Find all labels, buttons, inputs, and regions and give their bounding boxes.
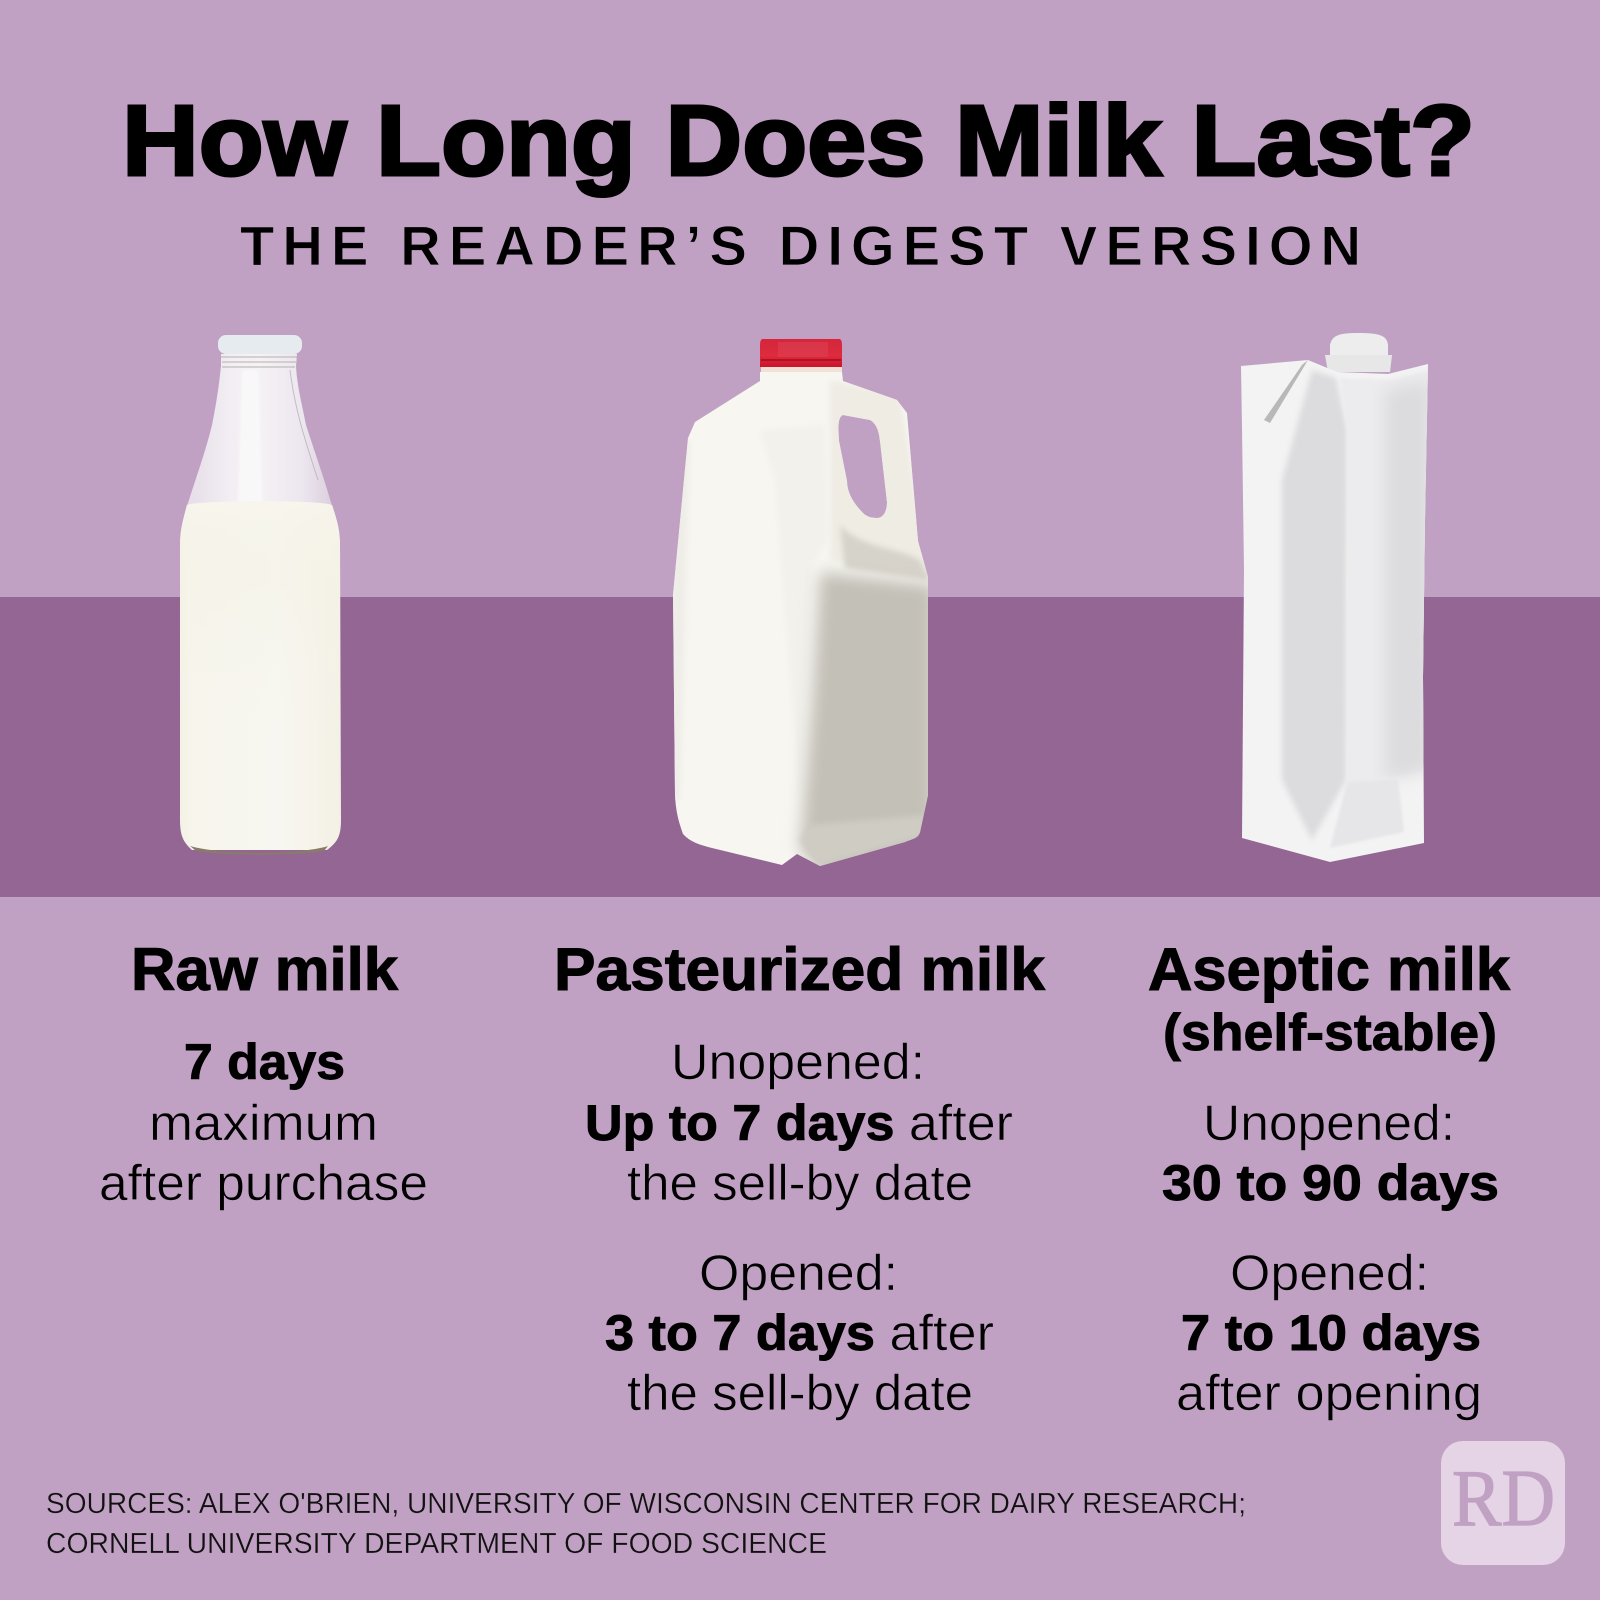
unopened: aseptic: 30 to 90 days [1162,1155,1499,1211]
heading: raw milk: Raw milk [131,936,399,1003]
column: pasteurized milk [554,936,1046,1421]
illustration: glass milk bottle [176,335,346,855]
opened: pasteurized [605,1245,994,1421]
sources [46,1488,1246,1560]
title: How Long Does Milk Last? [122,85,1475,197]
heading: aseptic milk [1148,936,1511,1062]
shelf life: raw milk: maximum [149,1095,378,1151]
shelf life: raw milk: after purchase [99,1155,428,1211]
unopened: aseptic: Unopened: [1203,1095,1455,1151]
illustration: plastic milk jug [673,339,928,866]
shelf life: raw milk: 7 days [184,1034,345,1090]
column: aseptic milk [1148,936,1511,1421]
logo: RD badge [1441,1441,1565,1565]
heading: aseptic milk: Aseptic milk [1148,936,1511,1003]
opened: aseptic [1176,1245,1482,1421]
unopened: pasteurized: Unopened: [671,1034,925,1090]
heading: aseptic milk: (shelf-stable) [1163,1004,1497,1062]
heading: pasteurized milk: Pasteurized milk [554,936,1046,1003]
subtitle: THE READER’S DIGEST VERSION [240,214,1361,277]
sources: CORNELL UNIVERSITY DEPARTMENT OF FOOD SCIENCE [46,1528,827,1560]
opened: aseptic: Opened: [1230,1245,1429,1301]
unopened: pasteurized: Up to 7 days after [585,1095,1013,1151]
unopened: pasteurized [585,1034,1013,1211]
opened: aseptic: 7 to 10 days [1181,1305,1481,1361]
opened: pasteurized: the sell-by date [627,1365,973,1421]
column: raw milk [99,936,428,1211]
dark shelf band [0,597,1600,897]
shelf life: raw milk [99,1034,428,1211]
unopened: aseptic [1162,1095,1499,1211]
opened: pasteurized: Opened: [699,1245,898,1301]
opened: aseptic: after opening [1176,1365,1482,1421]
opened: pasteurized: 3 to 7 days after [605,1305,994,1361]
logo: RD badge: RD [1452,1455,1555,1543]
unopened: pasteurized: the sell-by date [627,1155,973,1211]
illustration: aseptic carton [1235,333,1435,870]
sources: SOURCES: ALEX O'BRIEN, UNIVERSITY OF WISCONSIN CENTER FOR DAIRY RESEARCH; [46,1488,1246,1520]
